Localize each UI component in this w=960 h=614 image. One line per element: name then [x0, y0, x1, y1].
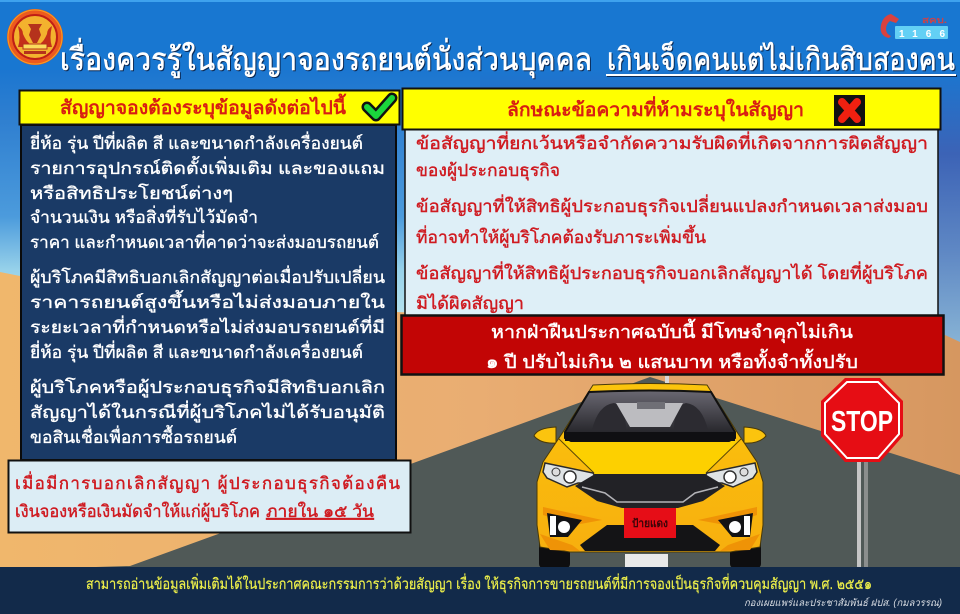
right panel body: ข้อสัญญาที่ให้สิทธิผู้ประกอบธุรกิจบอกเลิกสัญญาได้ โดยที่ผู้บริโภค [416, 261, 928, 284]
left panel list: ผู้บริโภคมีสิทธิบอกเลิกสัญญาต่อเมื่อปรับเปลี่ยน [30, 265, 385, 288]
left panel list [21, 125, 396, 460]
left panel list: รายการอุปกรณ์ติดตั้งเพิ่มเติม และของแถม [30, 156, 385, 179]
right panel body: ข้อสัญญาที่ยกเว้นหรือจำกัดความรับผิดที่เกิดจากการผิดสัญญา [416, 131, 928, 153]
panel: prohibited wording [402, 88, 940, 317]
panel: must specify in contract [20, 90, 400, 460]
logo emblem [7, 9, 63, 65]
callout: cancellation refund within 15 days: ภายใน ๑๕ วัน [266, 501, 374, 521]
left panel list: ราคารถยนต์สูงขึ้นหรือไม่ส่งมอบภายใน [30, 290, 385, 313]
grille [575, 474, 725, 508]
right panel heading [402, 88, 940, 130]
left panel list: ยี่ห้อ รุ่น ปีที่ผลิต สี และขนาดกำลังเครื่องยนต์ [30, 131, 363, 154]
left panel list: สัญญาได้ในกรณีที่ผู้บริโภคไม่ได้รับอนุมัติ [30, 400, 385, 423]
left panel heading [20, 90, 400, 124]
right panel body [405, 125, 938, 317]
panel: penalty warning [402, 316, 944, 374]
hotline icon 1166: สคบ. [922, 15, 947, 25]
icon: stop sign [821, 378, 903, 567]
left panel list: จำนวนเงิน หรือสิ่งที่รับไว้มัดจำ [30, 205, 258, 227]
icon: green check [367, 98, 392, 116]
fog lamps [547, 513, 582, 537]
title [60, 38, 956, 79]
icon: stop sign: STOP [831, 406, 893, 438]
right panel heading: ลักษณะข้อความที่ห้ามระบุในสัญญา [507, 96, 804, 122]
left panel list: ราคา และกำหนดเวลาที่คาดว่าจะส่งมอบรถยนต์ [30, 230, 379, 252]
body [537, 384, 763, 552]
panel: penalty warning: หากฝ่าฝืนประกาศฉบับนี้ มีโทษจำคุกไม่เกิน [491, 319, 853, 343]
right panel body: มิได้ผิดสัญญา [416, 293, 524, 313]
left panel list: หรือสิทธิประโยชน์ต่างๆ [30, 183, 233, 203]
illustration: yellow car [534, 384, 766, 568]
left panel heading: สัญญาจองต้องระบุข้อมูลดังต่อไปนี้ [60, 93, 347, 120]
callout: cancellation refund within 15 days [8, 460, 410, 532]
panel: penalty warning: ๑ ปี ปรับไม่เกิน ๒ แสนบาท หรือทั้งจำทั้งปรับ [486, 349, 858, 372]
headlights [543, 463, 599, 487]
callout: cancellation refund within 15 days: เมื่อมีการบอกเลิกสัญญา ผู้ประกอบธุรกิจต้องคืน [15, 471, 400, 494]
left panel list: ผู้บริโภคหรือผู้ประกอบธุรกิจมีสิทธิบอกเลิก [30, 377, 385, 398]
hotline icon 1166: 1166 [899, 29, 945, 40]
title: เรื่องควรรู้ในสัญญาจองรถยนต์นั่งส่วนบุคคล [60, 38, 592, 79]
callout: cancellation refund within 15 days: เงินจองหรือเงินมัดจำให้แก่ผู้บริโภค [15, 501, 260, 522]
hotline icon 1166 [881, 14, 948, 40]
icon: red cross [834, 95, 865, 126]
tyres [539, 540, 570, 568]
right panel body: ข้อสัญญาที่ให้สิทธิผู้ประกอบธุรกิจเปลี่ยนแปลงกำหนดเวลาส่งมอบ [416, 194, 928, 217]
bumper trims [543, 507, 757, 525]
left panel list: ระยะเวลาที่กำหนดหรือไม่ส่งมอบรถยนต์ที่มี [30, 315, 385, 337]
left panel list: ขอสินเชื่อเพื่อการซื้อรถยนต์ [30, 425, 237, 447]
footer [0, 567, 960, 614]
windshield [565, 390, 735, 441]
footer: กองเผยแพร่และประชาสัมพันธ์ ฝปส. (กมลวรรณ) [744, 597, 942, 609]
mirrors [534, 427, 556, 443]
left panel list: ยี่ห้อ รุ่น ปีที่ผลิต สี และขนาดกำลังเครื่องยนต์ [30, 340, 363, 363]
number plate [624, 508, 676, 538]
right panel body: ของผู้ประกอบธุรกิจ [416, 161, 560, 181]
illustration: yellow car: ป้ายแดง [632, 517, 668, 530]
right panel body: ที่อาจทำให้ผู้บริโภคต้องรับภาระเพิ่มขึ้น [416, 225, 706, 248]
hood [562, 441, 738, 474]
lower intake [580, 525, 720, 551]
